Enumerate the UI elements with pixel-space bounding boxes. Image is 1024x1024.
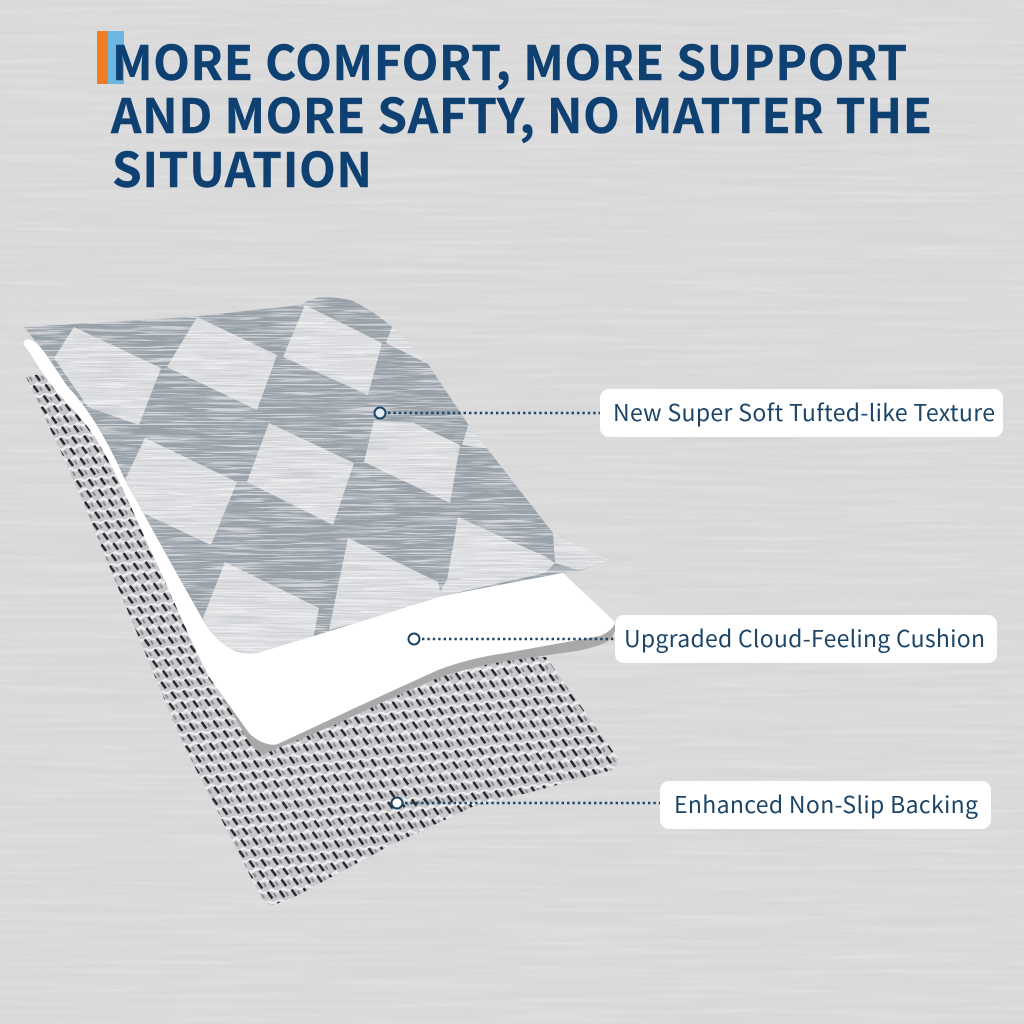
title: AND MORE SAFTY, NO MATTER THE [110,78,932,147]
title: MORE COMFORT, MORE SUPPORT [112,25,907,94]
callout: cushion [408,615,997,663]
callout: texture [374,389,1003,437]
title accent bars [97,31,124,84]
light diamonds [54,305,620,660]
callout: texture: New Super Soft Tufted-like Texture [613,394,995,428]
title [110,25,932,201]
callout: backing [392,781,991,829]
layered rug illustration [0,280,640,905]
title: SITUATION [112,132,372,201]
layer: cushion [24,339,615,745]
layer: patterned top rug [24,297,610,654]
layer: cushion shadow edge [204,600,618,754]
callout: backing: Enhanced Non-Slip Backing [674,786,978,820]
callout: cushion: Upgraded Cloud-Feeling Cushion [624,620,985,654]
layer: non-slip backing [26,374,618,905]
